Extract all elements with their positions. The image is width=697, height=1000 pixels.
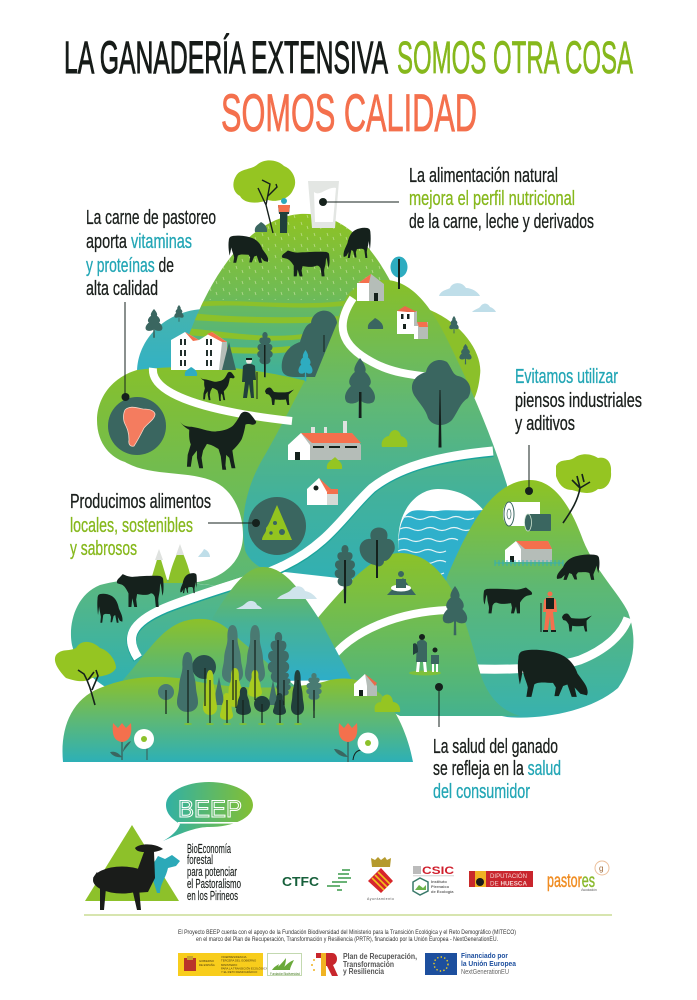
- cow right grazing: [557, 554, 599, 580]
- logo: pastores: g: [599, 864, 603, 873]
- logo: CSIC: [413, 865, 454, 895]
- BEEP logo: [85, 782, 253, 910]
- dog right: [562, 614, 592, 632]
- pine meditation: [443, 586, 467, 635]
- farmer: [541, 592, 557, 632]
- text: salud del ganado: [433, 736, 561, 803]
- icon: big tree top: [233, 160, 295, 233]
- meditation hill: [316, 553, 520, 716]
- cow left grazing: [97, 594, 123, 623]
- round dark tree: [360, 527, 395, 578]
- logo: TR: [311, 953, 338, 976]
- logo: CSIC: Instituto: [431, 879, 447, 884]
- meditating person: [387, 571, 416, 595]
- tagline: [187, 841, 241, 903]
- logo: Diputación de Huesca: [469, 871, 533, 888]
- text: carne de pastoreo: La carne de pastoreo: [86, 207, 216, 229]
- logo: Gobierno de España: VICEPRESIDENCIA: [221, 955, 247, 959]
- text: piensos: piensos industriales: [515, 390, 642, 412]
- small house valley: [307, 478, 338, 505]
- text: alimentación natural: mejora el perfil nutricional: [409, 188, 575, 210]
- left lobe hill: [97, 367, 340, 590]
- logo: Gobierno de España: TERCERA DEL GOBIERNO: [221, 958, 257, 962]
- logo: Diputación de Huesca: DIPUTACIÓN: [490, 873, 527, 880]
- logo: EU flag: [425, 953, 457, 975]
- forest: [158, 625, 322, 725]
- road meditation: [336, 610, 448, 653]
- road over cow hill: [131, 566, 283, 659]
- house top: [357, 274, 384, 301]
- lime bush centre: [327, 457, 342, 469]
- houses right: [397, 306, 428, 339]
- back teal hill: [137, 309, 230, 372]
- cow big grazing: [518, 650, 588, 697]
- logo: Gobierno de España: [178, 953, 268, 976]
- logo: crest: Ayuntamiento: [367, 897, 394, 901]
- tree left: [55, 642, 116, 705]
- text: Financiado por: [461, 951, 517, 976]
- text: salud del ganado: del consumidor: [433, 781, 530, 803]
- lime bush front: [375, 694, 400, 712]
- tagline: para potenciar: [187, 864, 237, 879]
- title line 2: SOMOS CALIDAD: [221, 84, 477, 143]
- central hill: [243, 280, 507, 590]
- text: carne de pastoreo: aporta vitaminas: [86, 231, 192, 253]
- barn: [495, 541, 563, 566]
- text: alimentación natural: [409, 165, 594, 233]
- funding text: El Proyecto BEEP cuenta con el apoyo de la Fundación Biodiversidad del Ministerio para la Transición Ecológica y el Reto Demográfico (MITECO): [178, 930, 516, 936]
- title: [64, 32, 633, 143]
- text: Plan de Recuperación: Transformación: [343, 960, 394, 969]
- icon: meat circle: [108, 397, 166, 455]
- mountain: [200, 567, 352, 682]
- shepherd: [242, 358, 257, 399]
- flowers right: [334, 723, 378, 762]
- pine right lower: [459, 344, 472, 364]
- lake: [398, 489, 488, 595]
- flowers left: [110, 723, 154, 760]
- logo: pastores: Asociación: [581, 887, 597, 892]
- logo: Gobierno de España: DE ESPAÑA: [199, 962, 215, 967]
- cow left: [117, 574, 164, 607]
- logo: crest: [367, 857, 394, 901]
- blue bush: [185, 367, 197, 376]
- text: salud del ganado: se refleja en la salud: [433, 758, 561, 780]
- text: Plan de Recuperación: [343, 952, 417, 976]
- icon: cheese circle: [248, 497, 306, 555]
- mountains small: [150, 544, 192, 583]
- clouds top right: [439, 283, 496, 312]
- callout lines: [122, 198, 533, 727]
- text: alimentos locales: y sabrosos: [70, 538, 137, 560]
- speech bubble: BEEP: [178, 796, 242, 823]
- text: Plan de Recuperación: y Resiliencia: [343, 967, 384, 976]
- right big hill: [420, 480, 633, 718]
- text: carne de pastoreo: y proteínas de: [86, 255, 174, 277]
- logo: CTFC: CTFC: [282, 874, 320, 889]
- text: alimentación natural: de la carne, leche y derivados: [409, 211, 594, 233]
- icon: shepherd in red shirt: [278, 198, 290, 233]
- cow top left: [228, 236, 268, 263]
- landscape illustration: [55, 160, 633, 762]
- big goat: [180, 412, 256, 470]
- logo: Gobierno de España: MINISTERIO: [221, 963, 238, 967]
- cow top right: [344, 228, 371, 258]
- speech bubble: [163, 782, 253, 841]
- logo: Fundación Biodiversidad: Fundación Biodiversidad: [270, 972, 300, 976]
- text: Plan de Recuperación: Plan de Recuperación,: [343, 952, 417, 961]
- cow top centre: [282, 250, 330, 276]
- text: piensos: y aditivos: [515, 413, 575, 435]
- far right green hill: [420, 310, 480, 412]
- black sheep: [93, 844, 163, 910]
- logo: pastores: pastores: [547, 871, 595, 892]
- mid hill: [120, 619, 300, 690]
- logo: CSIC: Pirenaico: [431, 884, 450, 889]
- tree right: [556, 454, 611, 523]
- logo: CTFC: [282, 870, 351, 890]
- lime bush right: [382, 430, 408, 447]
- front hill: [62, 677, 413, 762]
- teal goat: [152, 855, 180, 893]
- logo: CSIC: de Ecología: [431, 889, 454, 894]
- icon: small bush: [255, 222, 267, 232]
- text: alimentos locales: [70, 491, 211, 560]
- pines right: [449, 316, 459, 333]
- teal pine: [298, 350, 313, 381]
- pine left 2: [174, 305, 184, 322]
- pine centre: [345, 358, 375, 418]
- green triangle: [85, 825, 179, 901]
- text: Financiado por: NextGenerationEU: [461, 967, 509, 976]
- cow pasture hill: [71, 579, 300, 692]
- tagline: el Pastoralismo: [187, 876, 241, 891]
- text: Financiado por: la Unión Europea: [461, 959, 517, 968]
- text: piensos: [515, 366, 642, 435]
- text: alimentos locales: locales, sostenibles: [70, 515, 193, 537]
- logo: CSIC: CSIC: [422, 865, 454, 877]
- logo: Gobierno de España: PARA LA TRANSICIÓN ECOLÓGICA: [221, 966, 268, 970]
- hay bales: [503, 502, 551, 531]
- text: alimentos locales: Producimos alimentos: [70, 491, 211, 513]
- tagline: forestal: [187, 852, 213, 867]
- dark bush trees: [282, 311, 337, 377]
- icon: milk glass: [308, 181, 339, 228]
- divider: [84, 914, 612, 916]
- bush: [368, 318, 383, 329]
- text: alimentación natural: La alimentación natural: [409, 165, 558, 187]
- text: carne de pastoreo: alta calidad: [86, 278, 158, 300]
- small house front: [354, 674, 377, 696]
- goat small: [200, 372, 235, 401]
- text: carne de pastoreo: [86, 207, 216, 300]
- wavy tree: [257, 332, 273, 378]
- pine left 1: [146, 309, 162, 338]
- apartment building: [171, 332, 227, 370]
- wavy tree valley: [335, 545, 355, 604]
- logo: Diputación de Huesca: DE HUESCA: [490, 882, 528, 888]
- funding text: [178, 930, 516, 943]
- cow left small: [180, 573, 197, 593]
- dark triangle tree: [222, 342, 236, 370]
- cow right standing: [483, 587, 532, 613]
- clouds mountain: [236, 586, 317, 609]
- white roads: [131, 298, 493, 657]
- logo: Fundación Biodiversidad: [268, 954, 302, 976]
- road right: [477, 618, 628, 669]
- icon: blue tree: [390, 256, 408, 289]
- cloud small: [198, 549, 210, 557]
- factory: [288, 421, 361, 460]
- logo: pastores: [547, 861, 609, 892]
- funding text: en el marco del Plan de Recuperación, Transformación y Resiliencia (PRTR), financiado por la Unión Europea - NextGenerationEU.: [196, 937, 498, 943]
- text: salud del ganado: La salud del ganado: [433, 736, 558, 758]
- family: [409, 634, 441, 676]
- text: Financiado por: Financiado por: [461, 951, 508, 960]
- logo: Gobierno de España: GOBIERNO: [199, 959, 215, 963]
- big dark tree: [412, 360, 470, 447]
- top pasture hill: [189, 214, 390, 380]
- tagline: en los Pirineos: [187, 888, 238, 903]
- dog: [265, 387, 294, 405]
- text: piensos: Evitamos utilizar: [515, 366, 618, 388]
- tagline: BioEconomía: [187, 841, 231, 856]
- logo: Gobierno de España: Y EL RETO DEMOGRÁFICO: [221, 970, 258, 974]
- title line 1: LA GANADERÍA EXTENSIVA: [64, 32, 388, 83]
